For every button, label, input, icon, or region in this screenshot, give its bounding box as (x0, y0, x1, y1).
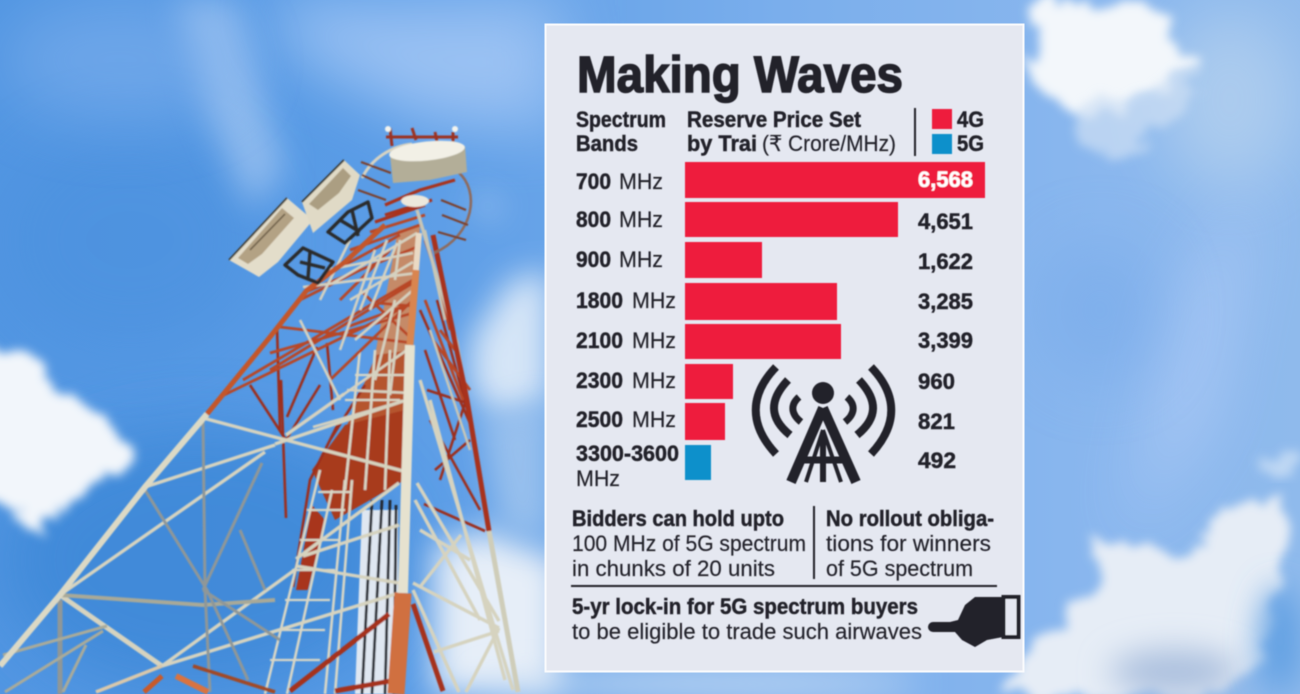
row: 800 MHz: MHz (619, 207, 663, 232)
row: 2300 MHz: 960 (918, 369, 955, 394)
dish mounts (285, 202, 372, 283)
row: 2100 MHz: 2100 (576, 328, 623, 353)
row: 800 MHz: 4,651 (918, 209, 973, 234)
row: 2100 MHz: MHz (632, 328, 676, 353)
column heading: reserve price: by Trai (687, 131, 757, 156)
cloud: bottom strip (480, 674, 920, 694)
legend (932, 107, 984, 156)
row: 2100 MHz (576, 324, 973, 359)
note: bidders: 100 MHz of 5G spectrum (572, 531, 806, 556)
tower back lattice (250, 300, 485, 587)
cloud: behind tower upper (470, 270, 550, 420)
railing and beacons (385, 126, 458, 146)
orange lower braces (96, 604, 443, 692)
ladder and cage (265, 350, 405, 694)
cloud: small wisp (472, 194, 504, 218)
tower centre leg (396, 233, 419, 694)
row: 2100 MHz: 3,399 (918, 328, 973, 353)
tower right leg (433, 235, 518, 692)
row: 1800 MHz (576, 283, 973, 320)
note: lock-in: to be eligible to trade such airwaves (572, 619, 922, 644)
row: 700 MHz: MHz (619, 169, 663, 194)
legend: 4G (957, 107, 984, 132)
icon: antenna tower (756, 367, 891, 482)
cloud: top right (1030, 0, 1197, 125)
row: 1800 MHz: MHz (632, 288, 676, 313)
tower photo (0, 126, 518, 694)
row: 700 MHz: 6,568 (918, 167, 973, 192)
note: rollout: No rollout obliga- (826, 506, 994, 531)
column heading: spectrum bands: Spectrum (576, 107, 666, 132)
row: 700 MHz (576, 162, 985, 198)
row: 800 MHz: 800 (576, 207, 611, 232)
note: bidders: Bidders can hold upto (572, 506, 784, 531)
row: 1800 MHz: 1800 (576, 288, 623, 313)
cloud: corner blue (1260, 586, 1300, 694)
row: 900 MHz: 1,622 (918, 249, 973, 274)
row: 1800 MHz: 3,285 (918, 289, 973, 314)
lower pale braces (3, 380, 513, 694)
note: lock-in (572, 594, 922, 644)
title: Making Waves (577, 46, 903, 103)
note: bidders (572, 506, 806, 581)
row: 900 MHz: 900 (576, 247, 611, 272)
cloud: top right haze (1070, 70, 1200, 155)
cloud: left (0, 335, 137, 532)
cloud: behind tower lower (434, 530, 560, 694)
row: 3300-3600 MHz (576, 441, 956, 491)
panel: making waves (546, 24, 1024, 672)
legend: 5G (957, 131, 984, 156)
dish: left (229, 198, 313, 277)
antenna ring (358, 144, 471, 253)
row: 2300 MHz: 2300 (576, 368, 623, 393)
row: 800 MHz (576, 202, 973, 237)
dish: top right (388, 138, 467, 183)
column heading: spectrum bands (576, 107, 666, 156)
icon: pointing hand (928, 597, 1018, 647)
row: 900 MHz (576, 242, 973, 278)
row: 2500 MHz: 2500 (576, 407, 623, 432)
dish: middle (302, 160, 360, 233)
cloud: bottom right (1000, 495, 1290, 694)
row: 2300 MHz: MHz (632, 368, 676, 393)
panel background (546, 24, 1024, 672)
row: 2300 MHz (576, 364, 955, 399)
row: 2500 MHz: 821 (918, 409, 955, 434)
row: 2500 MHz (576, 403, 955, 440)
column heading: reserve price: Reserve Price Set (687, 107, 862, 132)
row: 3300-3600 MHz: 492 (918, 448, 956, 473)
column heading: reserve price: (₹ Crore/MHz) (762, 131, 896, 156)
row: 3300-3600 MHz: 3300-3600 (576, 441, 679, 466)
cloud: haze right of tower (480, 400, 550, 540)
row: 3300-3600 MHz: MHz (576, 466, 620, 491)
bar chart (576, 162, 985, 491)
row: 2500 MHz: MHz (632, 407, 676, 432)
tower core mass (296, 225, 420, 694)
note: rollout: tions for winners (826, 531, 991, 556)
column heading: reserve price (687, 107, 896, 156)
row: 900 MHz: MHz (619, 247, 663, 272)
upper lattice (220, 215, 470, 400)
row: 700 MHz: 700 (576, 169, 611, 194)
note: bidders: in chunks of 20 units (572, 556, 775, 581)
column heading: spectrum bands: Bands (576, 131, 638, 156)
cloud: right wisp (1250, 448, 1300, 475)
small radome (401, 195, 429, 207)
note: lock-in: 5-yr lock-in for 5G spectrum buyers (572, 594, 918, 619)
note: rollout (826, 506, 994, 581)
note: rollout: of 5G spectrum (826, 556, 973, 581)
cloud: bottom right shade (1110, 650, 1240, 694)
tower left leg (0, 225, 385, 666)
